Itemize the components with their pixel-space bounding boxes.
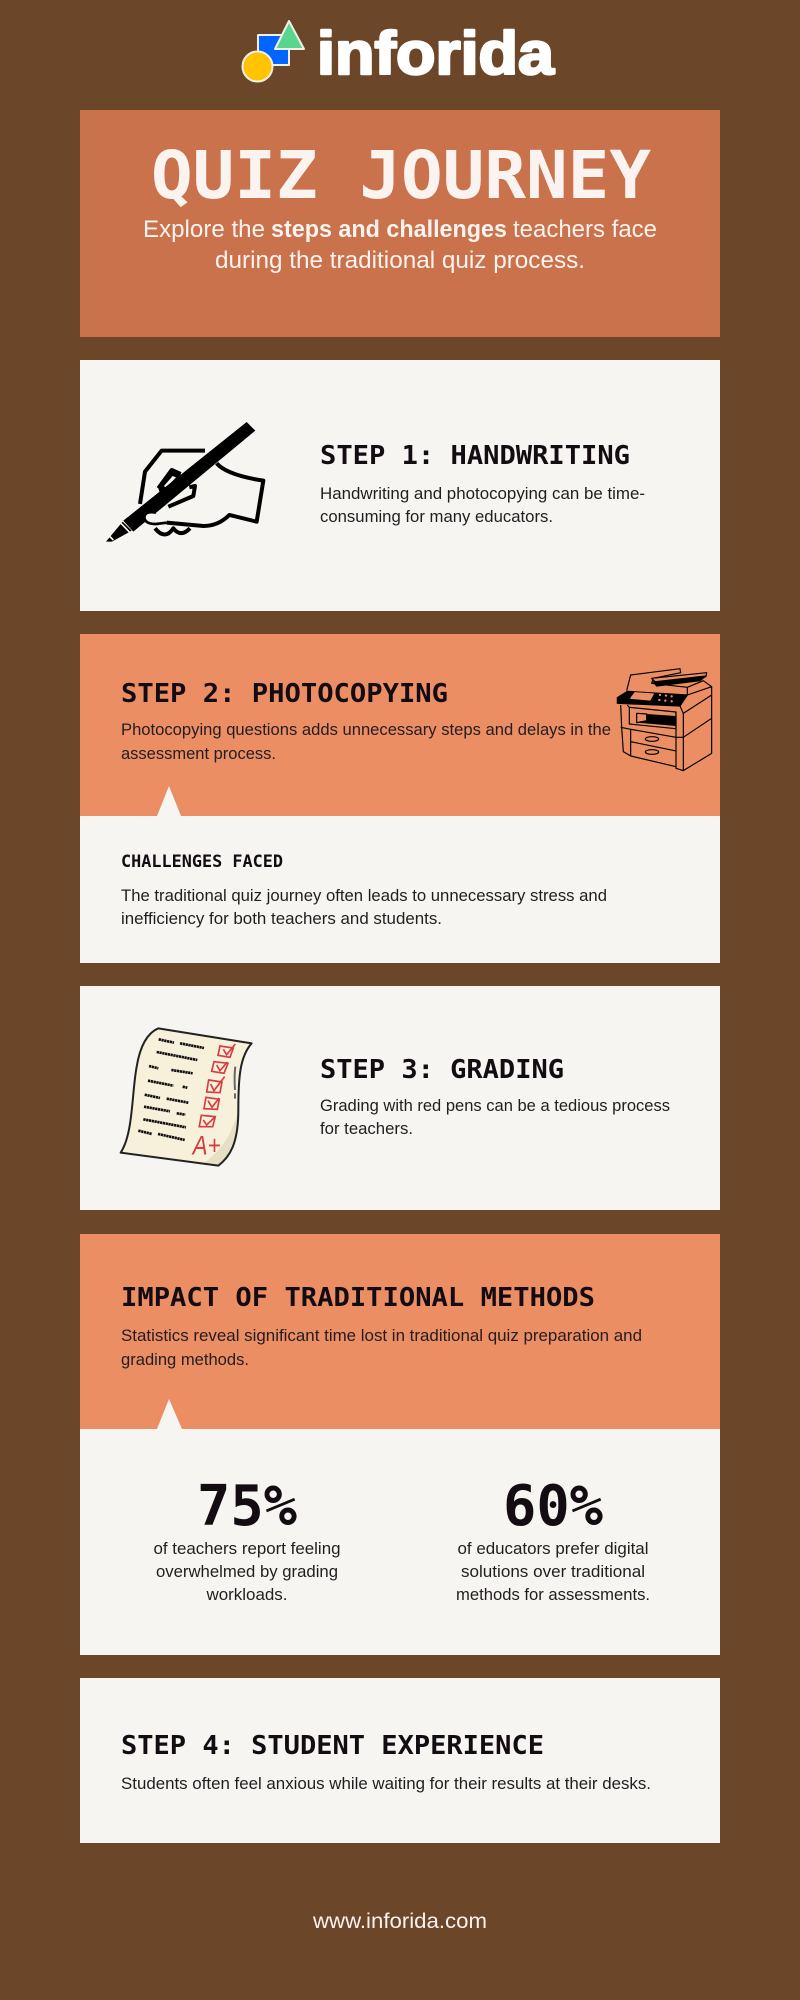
step 1 heading: STEP 1: HANDWRITING: [320, 441, 630, 471]
logo: [242, 20, 555, 87]
subtitle: steps and challenges: [271, 216, 507, 243]
A+ mark: A+: [191, 1131, 221, 1161]
step 1 text: Handwriting and photocopying can be time-: [320, 485, 645, 503]
step 2 text: Photocopying questions adds unnecessary steps and delays in the: [121, 721, 611, 739]
step 3 text: for teachers.: [320, 1120, 413, 1138]
challenges text: [121, 887, 607, 928]
panel: step 1: [80, 360, 720, 611]
stat: 60%: solutions over traditional: [461, 1563, 645, 1581]
panel: header: [80, 110, 720, 337]
stat: 75%: 75%: [197, 1474, 297, 1539]
icon: photocopier: [617, 669, 712, 771]
stat: 75%: workloads.: [205, 1586, 288, 1604]
pointer triangle: [157, 786, 181, 816]
step 2 heading: STEP 2: PHOTOCOPYING: [121, 679, 448, 709]
stat: 75%: of teachers report feeling: [154, 1540, 340, 1558]
subtitle: Explore the: [143, 216, 265, 243]
step 4 text: Students often feel anxious while waiting for their results at their desks.: [121, 1775, 651, 1793]
impact heading: IMPACT OF TRADITIONAL METHODS: [121, 1283, 595, 1313]
subtitle: during the traditional quiz process.: [215, 247, 585, 274]
step 3 text: [320, 1097, 670, 1138]
footer url: www.inforida.com: [312, 1910, 487, 1933]
stat: 75%: [154, 1474, 340, 1604]
stat: 75%: overwhelmed by grading: [156, 1563, 338, 1581]
step 1 text: consuming for many educators.: [320, 508, 553, 526]
challenges text: inefficiency for both teachers and students.: [121, 910, 442, 928]
logo icon: [242, 21, 304, 82]
stat: 60%: [456, 1474, 650, 1604]
impact text: [121, 1327, 642, 1369]
step 3 text: Grading with red pens can be a tedious process: [320, 1097, 670, 1115]
step 2 text: [121, 721, 611, 763]
step 1 text: [320, 485, 645, 526]
icon: graded paper: [121, 1028, 252, 1166]
subtitle: [143, 216, 657, 274]
panel: step 4: [80, 1678, 720, 1843]
pointer triangle: [157, 1399, 182, 1429]
subtitle: teachers face: [513, 216, 657, 243]
panel: impact: [80, 1234, 720, 1429]
title: QUIZ JOURNEY: [151, 137, 651, 214]
step 3 heading: STEP 3: GRADING: [320, 1055, 564, 1085]
challenges text: The traditional quiz journey often leads to unnecessary stress and: [121, 887, 607, 905]
panel: step 2: [80, 634, 720, 816]
impact text: Statistics reveal significant time lost in traditional quiz preparation and: [121, 1327, 642, 1345]
panel: step 3: [80, 986, 720, 1210]
panel: challenges faced: [80, 786, 720, 963]
stat: 60%: 60%: [503, 1474, 603, 1539]
impact text: grading methods.: [121, 1351, 249, 1369]
stat: 60%: of educators prefer digital: [458, 1540, 648, 1558]
logo wordmark: inforida: [317, 20, 555, 87]
panel: statistics: [80, 1399, 720, 1655]
challenges heading: CHALLENGES FACED: [121, 852, 283, 871]
stat: 60%: methods for assessments.: [456, 1586, 650, 1604]
step 2 text: assessment process.: [121, 745, 276, 763]
step 4 heading: STEP 4: STUDENT EXPERIENCE: [121, 1731, 544, 1761]
icon: hand writing with pen: [106, 422, 263, 542]
